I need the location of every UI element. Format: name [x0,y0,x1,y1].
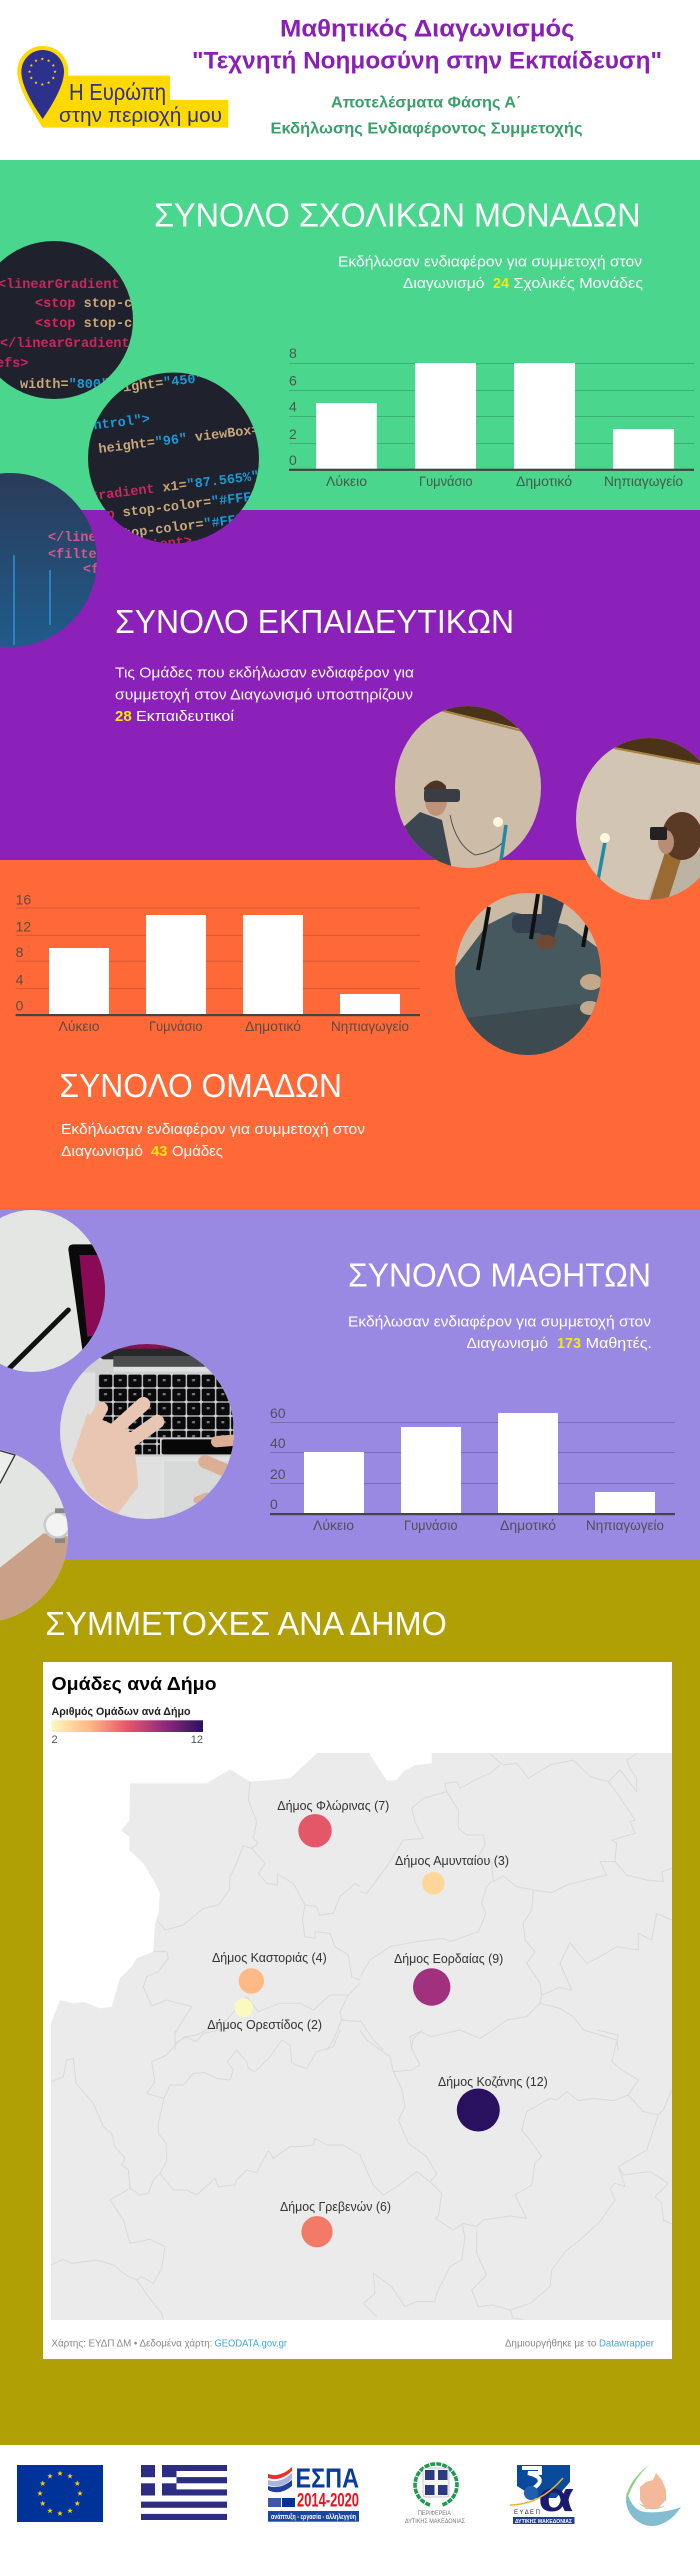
map source credit: Datawrapper [599,2338,654,2350]
marker: Φλώρινα [277,1798,389,1847]
panel: municipalities background [0,1560,700,2445]
map source credit: GEODATA.gov.gr [214,2338,287,2350]
heading: schools: ΣΥΝΟΛΟ ΣΧΟΛΙΚΩΝ ΜΟΝΑΔΩΝ [154,197,640,234]
photo: code circle 1: <stop stop-c [35,297,132,312]
logo: ΕΥΔ ΕΠ Δυτικής Μακεδονίας [510,2465,574,2525]
text block: teachers: Τις Ομάδες που εκδήλωσαν ενδιαφέρον για [115,665,414,681]
bar chart: students [270,1405,675,1533]
photo: code circle 2 [88,372,259,544]
panel: teachers background [0,510,700,860]
text block: schools: Διαγωνισμό [403,276,484,292]
bar chart: teams: 4 [16,972,24,988]
logo: Περιφέρεια Δυτικής Μακεδονίας: ΠΕΡΙΦΕΡΕΙΑ [418,2510,451,2517]
marker: Καστοριά: Δήμος Καστοριάς (4) [212,1950,327,1965]
text block: teams: Ομάδες [172,1144,223,1160]
bar chart: teams: Γυμνάσιο [149,1018,203,1034]
legend: 2 [52,1734,58,1746]
text block: teams: Εκδήλωσαν ενδιαφέρον για συμμετοχή στον [61,1122,365,1138]
bar chart: teams: 0 [16,997,24,1013]
logo: ΕΣΠΑ 2014-2020 [268,2463,359,2522]
text block: students: 173 [557,1336,581,1352]
map source credit [52,2338,654,2350]
heading: teachers: ΣΥΝΟΛΟ ΕΚΠΑΙΔΕΥΤΙΚΩΝ [115,603,514,640]
photo: code circle 3: <filte [48,548,97,563]
bar chart: students: 0 [270,1496,278,1512]
bar chart: students: 20 [270,1466,286,1482]
photo: code circle 2: top stop-color="#FFF" st [90,487,285,525]
panel: students background [0,1210,700,1560]
text block: students: Εκδήλωσαν ενδιαφέρον για συμμετοχή στον [348,1315,651,1331]
text block: students: Διαγωνισμό [466,1336,548,1352]
bar chart: teams: 8 [16,944,24,960]
photo: code circle 3 [0,470,100,650]
bar chart: schools: 6 [289,373,297,389]
text block: teams [61,1122,365,1160]
photo: code circle 2: rGradient x1="87.565%" y1 [81,467,284,506]
photo: code circle 1: width="800" [20,378,109,393]
subtitle: Εκδήλωσης Ενδιαφέροντος Συμμετοχής [270,120,582,137]
panel: map card [43,1662,672,2359]
logo: EU flag [17,2465,103,2522]
logo: regional map swoosh [626,2464,681,2526]
logo: ΕΥΔ ΕΠ Δυτικής Μακεδονίας: Ε Υ Δ Ε Π [514,2509,540,2516]
text block: teachers: συμμετοχή στον Διαγωνισμό υποστηρίζουν [115,687,413,703]
marker: Ορεστίδα [207,1998,322,2032]
marker: Εορδαία [394,1951,503,2006]
logo: Περιφέρεια Δυτικής Μακεδονίας: ΔΥΤΙΚΗΣ ΜΑΚΕΔΟΝΙΑΣ [405,2518,465,2525]
text block: schools [338,255,643,292]
marker: Καστοριά [212,1950,327,1994]
photo: VR man [395,706,541,868]
photo: code circle 1 [0,240,140,400]
title: Μαθητικός Διαγωνισμός [280,16,574,43]
photo: code circle 1: <linearGradient [0,278,120,293]
marker: Γρεβενά: Δήμος Γρεβενών (6) [280,2199,391,2214]
logo: ΕΥΔ ΕΠ Δυτικής Μακεδονίας: ΔΥΤΙΚΗΣ ΜΑΚΕΔΟΝΙΑΣ [515,2519,573,2525]
photo: code circle 2: ontrol"> [85,413,151,435]
logo: ΕΣΠΑ 2014-2020: ΕΣΠΑ [296,2463,359,2494]
logo: Η Ευρώπη στην περιοχή μου [17,46,228,128]
photo: code circle 2: adient> [135,534,193,556]
text block: teams: 43 [151,1144,168,1160]
photo: code circle 2: " height="96" viewBox= [82,423,260,460]
title: "Τεχνητή Νοημοσύνη στην Εκπαίδευση" [192,47,662,74]
bar chart: teams: Λύκειο [58,1018,100,1034]
text block: teachers: 28 [115,709,132,725]
photo: code circle 3: <f [83,563,99,578]
text block: students [348,1315,652,1352]
text block: schools: Εκδήλωσαν ενδιαφέρον για συμμετοχή στον [338,255,642,271]
subtitle: Αποτελέσματα Φάσης Α΄ [331,94,521,111]
bar chart: schools: 0 [289,452,297,468]
logo: Greek flag [141,2465,227,2520]
text block: schools: 24 [493,276,509,292]
legend: Αριθμός Ομάδων ανά Δήμο [52,1706,191,1718]
bar chart: students: 60 [270,1405,286,1421]
bar chart: students: Νηπιαγωγείο [586,1517,664,1533]
marker: Φλώρινα: Δήμος Φλώρινας (7) [277,1798,389,1813]
bar chart: schools: 2 [289,426,297,442]
bar chart: teams: Νηπιαγωγείο [331,1018,409,1034]
heading: municipalities: ΣΥΜΜΕΤΟΧΕΣ ΑΝΑ ΔΗΜΟ [45,1605,447,1642]
legend [52,1706,203,1746]
bar chart: students: Λύκειο [313,1517,354,1533]
bar chart: teams [16,892,420,1034]
logo: Η Ευρώπη στην περιοχή μου: Η Ευρώπη [69,79,166,105]
legend: 12 [191,1734,203,1746]
photo: tablet and pen [0,1210,105,1372]
logo: Η Ευρώπη στην περιοχή μου: στην περιοχή μου [59,105,222,127]
bar chart: schools: Γυμνάσιο [419,473,473,489]
photo: code circle 1: <stop stop-c [35,317,132,332]
marker: Κοζάνη: Δήμος Κοζάνης (12) [438,2074,548,2089]
bar chart: schools: Δημοτικό [516,473,572,489]
logo: ΕΣΠΑ 2014-2020: ανάπτυξη - εργασία - αλληλεγγύη [271,2513,356,2521]
text block: teams: Διαγωνισμό [61,1144,143,1160]
bar chart: teams: 16 [16,892,31,908]
heading: teams: ΣΥΝΟΛΟ ΟΜΑΔΩΝ [59,1067,342,1104]
photo: wrist with watch [0,1450,68,1620]
text block: teachers [115,665,414,725]
photo: VR floor with legs [455,893,601,1055]
bar chart: students: Γυμνάσιο [404,1517,458,1533]
marker: Αμύνταιο [395,1853,509,1895]
text block: students: Μαθητές. [586,1336,652,1352]
map source credit: Χάρτης: ΕΥΔΠ ΔΜ • Δεδομένα χάρτη: [52,2338,212,2350]
marker: Αμύνταιο: Δήμος Αμυνταίου (3) [395,1853,509,1868]
marker: Ορεστίδα: Δήμος Ορεστίδος (2) [207,2017,322,2032]
photo: code circle 2: p stop-color="#FFF" of [98,509,277,546]
chart title: Ομάδες ανά Δήμο [52,1673,216,1694]
map [51,1750,672,2320]
bar chart: schools: Λύκειο [326,473,367,489]
bar chart: students: Δημοτικό [500,1517,556,1533]
text block: schools: Σχολικές Μονάδες [513,276,643,292]
marker: Εορδαία: Δήμος Εορδαίας (9) [394,1951,503,1966]
photo: code circle 2: ight="450" [122,372,205,396]
bar chart: schools [289,345,694,489]
logo: ΕΥΔ ΕΠ Δυτικής Μακεδονίας: α [538,2473,574,2520]
panel: footer background [0,2445,700,2557]
subtitle [270,94,582,137]
logo: Περιφέρεια Δυτικής Μακεδονίας [405,2464,465,2525]
photo: code circle 3: </line [48,531,97,546]
marker: Γρεβενά [280,2199,391,2247]
photo: VR woman [570,735,700,905]
bar chart: schools: Νηπιαγωγείο [604,473,683,489]
bar chart: schools: 8 [289,345,297,361]
panel: schools background [0,160,700,510]
title [192,16,662,74]
bar chart: students: 40 [270,1435,286,1451]
heading: students: ΣΥΝΟΛΟ ΜΑΘΗΤΩΝ [348,1257,651,1294]
marker: Κοζάνη [438,2074,548,2132]
bar chart: teams: 12 [16,918,31,934]
photo: hands on laptop keyboard [57,1342,237,1522]
bar chart: schools: 4 [289,399,297,415]
photo: code circle 1: </linearGradient [0,337,130,352]
panel: header background [0,0,700,160]
logo: ΕΣΠΑ 2014-2020: 2014-2020 [297,2491,359,2512]
bar chart: teams: Δημοτικό [245,1018,301,1034]
panel: teams background [0,860,700,1210]
text block: teachers: Εκπαιδευτικοί [136,709,235,725]
map source credit: Δημιουργήθηκε με το [505,2338,596,2350]
